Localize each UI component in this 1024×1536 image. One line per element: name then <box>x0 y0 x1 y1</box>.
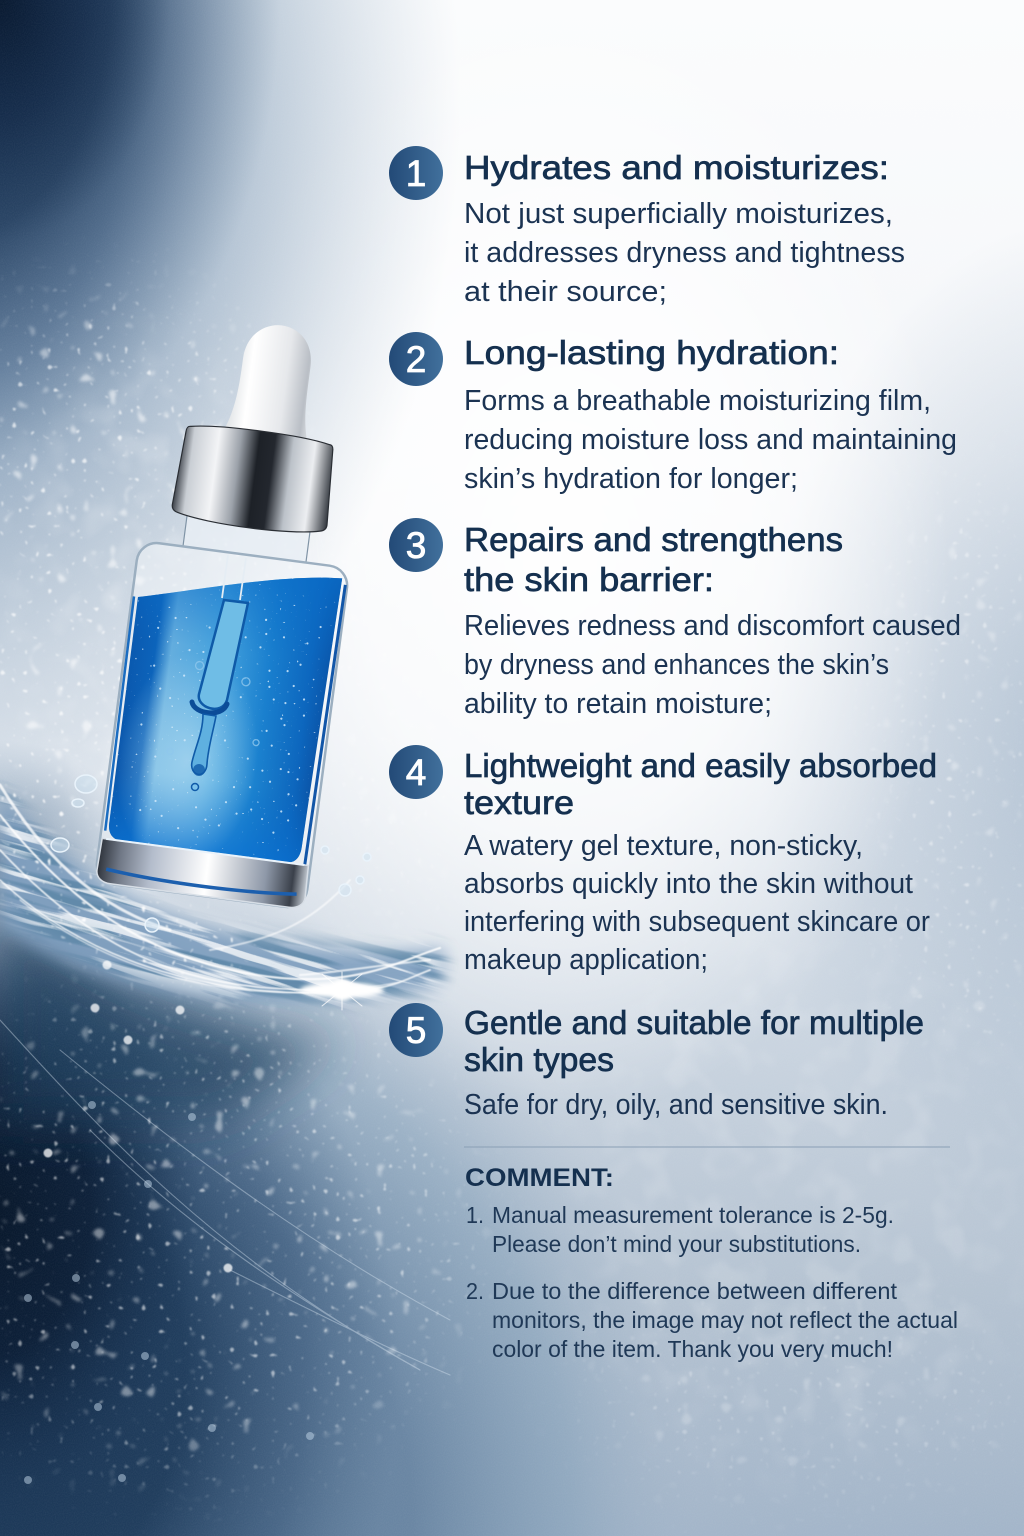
serum dropper bottle <box>96 325 348 908</box>
body text 1 <box>464 198 905 308</box>
benefit 3 <box>389 518 961 720</box>
heading 4 <box>464 747 937 821</box>
heading 2: Long-lasting hydration: <box>464 334 839 371</box>
heading 3 <box>464 521 843 598</box>
number badge 1 <box>389 146 443 200</box>
number badge 2: 2 <box>406 339 426 380</box>
comment note 1: Please don’t mind your substitutions. <box>492 1231 861 1257</box>
number badge 3: 3 <box>406 525 426 566</box>
benefit 4 <box>389 745 937 976</box>
heading 3: the skin barrier: <box>464 561 714 598</box>
bubbles in serum <box>129 605 321 843</box>
benefit 1 <box>389 146 905 308</box>
body text 1: Not just superficially moisturizes, <box>464 198 893 230</box>
body text 2: Forms a breathable moisturizing film, <box>464 385 931 417</box>
number badge 2 <box>389 332 443 386</box>
body text 2: skin’s hydration for longer; <box>464 463 798 495</box>
body text 1: it addresses dryness and tightness <box>464 237 905 269</box>
body text 2 <box>464 385 957 495</box>
sparkle flare <box>300 972 384 1010</box>
blue serum liquid <box>106 552 342 865</box>
body text 3: by dryness and enhances the skin’s <box>464 649 889 681</box>
body text 4: interfering with subsequent skincare or <box>464 906 930 938</box>
icon: silver collar <box>171 421 338 538</box>
number badge 5 <box>389 1003 443 1057</box>
number badge 5: 5 <box>406 1010 426 1051</box>
body text 3: ability to retain moisture; <box>464 688 772 720</box>
inner dropper pipette <box>192 555 248 790</box>
water splash around the bottle base <box>0 744 456 1484</box>
comment note 2: 2. <box>466 1278 484 1304</box>
heading 5 <box>464 1004 924 1078</box>
body text 4 <box>464 830 930 976</box>
glass neck <box>183 514 310 563</box>
comment note 2 <box>466 1278 958 1362</box>
number badge 1: 1 <box>406 153 426 194</box>
body text 4: makeup application; <box>464 944 708 976</box>
heading 3: Repairs and strengthens <box>464 521 843 558</box>
number badge 4: 4 <box>406 752 426 793</box>
body text 4: absorbs quickly into the skin without <box>464 868 913 900</box>
comment heading: COMMENT: <box>465 1164 614 1192</box>
soft bokeh dots <box>48 965 228 1268</box>
body text 4: A watery gel texture, non-sticky, <box>464 830 863 862</box>
comment note 2: color of the item. Thank you very much! <box>492 1336 893 1362</box>
glass base <box>95 838 309 909</box>
comment note 1: 1. <box>466 1202 484 1228</box>
body text 5: Safe for dry, oily, and sensitive skin. <box>464 1089 888 1121</box>
benefit 5 <box>389 1003 924 1121</box>
heading 5: Gentle and suitable for multiple <box>464 1004 924 1041</box>
icon: white rubber bulb <box>220 319 324 449</box>
body text 3: Relieves redness and discomfort caused <box>464 610 961 642</box>
droplets beside bottle <box>51 775 371 932</box>
heading 4: texture <box>464 784 574 821</box>
glass body <box>94 541 350 909</box>
heading 5: skin types <box>464 1041 614 1078</box>
number badge 4 <box>389 745 443 799</box>
comment note 1: Manual measurement tolerance is 2-5g. <box>492 1202 894 1228</box>
body text 3 <box>464 610 961 720</box>
comment note 1 <box>466 1202 894 1257</box>
body text 2: reducing moisture loss and maintaining <box>464 424 957 456</box>
heading 1: Hydrates and moisturizes: <box>464 149 889 186</box>
heading 4: Lightweight and easily absorbed <box>464 747 937 784</box>
comment note 2: Due to the difference between different <box>492 1278 898 1304</box>
number badge 3 <box>389 518 443 572</box>
comment note 2: monitors, the image may not reflect the actual <box>492 1307 958 1333</box>
benefit 2 <box>389 332 957 495</box>
body text 1: at their source; <box>464 276 667 308</box>
